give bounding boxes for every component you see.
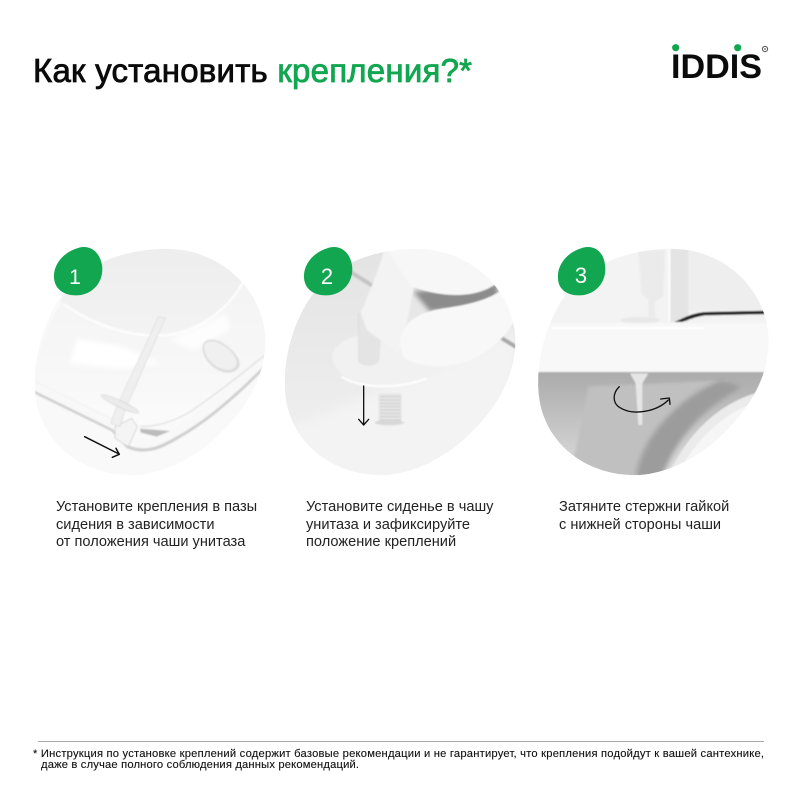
bolt (378, 394, 402, 420)
flange (333, 333, 443, 385)
badge: 1 (54, 247, 102, 295)
text: step 1: сидения в зависимости (56, 517, 215, 533)
panel: step 2 (285, 247, 516, 549)
text: step 2: Установите сиденье в чашу (306, 499, 494, 515)
rod (630, 373, 648, 425)
arrow: rotate (614, 387, 670, 412)
badge: 3 (558, 247, 605, 295)
badge: 3: 3 (575, 263, 587, 288)
badge: 2: 2 (321, 264, 333, 289)
rim band (535, 323, 775, 372)
hinge clip (115, 418, 137, 447)
arrow: down (359, 386, 369, 425)
arrow: slide right (85, 437, 119, 457)
text: step 3: с нижней стороны чаши (559, 517, 721, 533)
footnote: даже в случае полного соблюдения данных рекомендаций. (41, 759, 359, 771)
text: step 2: унитаза и зафиксируйте (306, 517, 470, 533)
upper back (685, 243, 778, 310)
photo: seat with fastener (35, 249, 265, 458)
text: step 2: положение креплений (306, 534, 456, 550)
stem (358, 334, 380, 366)
panel: step 1 (35, 247, 265, 549)
badge: 1: 1 (69, 266, 81, 289)
seat block (361, 252, 414, 342)
seat roll (400, 288, 518, 366)
logo: IDDIS: IDDIS (671, 48, 762, 86)
seat rim (33, 358, 267, 446)
underside (538, 371, 764, 470)
bumper (202, 340, 240, 373)
text: step 1: Установите крепления в пазы (56, 499, 257, 515)
text: step 3: Затяните стержни гайкой (559, 499, 729, 515)
footnote: * Инструкция по установке креплений содержит базовые рекомендации и не гарантирует, что крепления подойдут к вашей сантехнике, (33, 748, 764, 760)
dark gap (413, 282, 500, 312)
title: Как установить крепления?* (33, 52, 472, 89)
panel: step 3 (538, 247, 766, 532)
photo: underside of bowl (538, 249, 766, 476)
text: step 1: от положения чаши унитаза (56, 534, 246, 550)
badge: 2 (304, 247, 352, 295)
rod (111, 317, 165, 427)
photo: seat on bowl with bolt (285, 252, 516, 475)
